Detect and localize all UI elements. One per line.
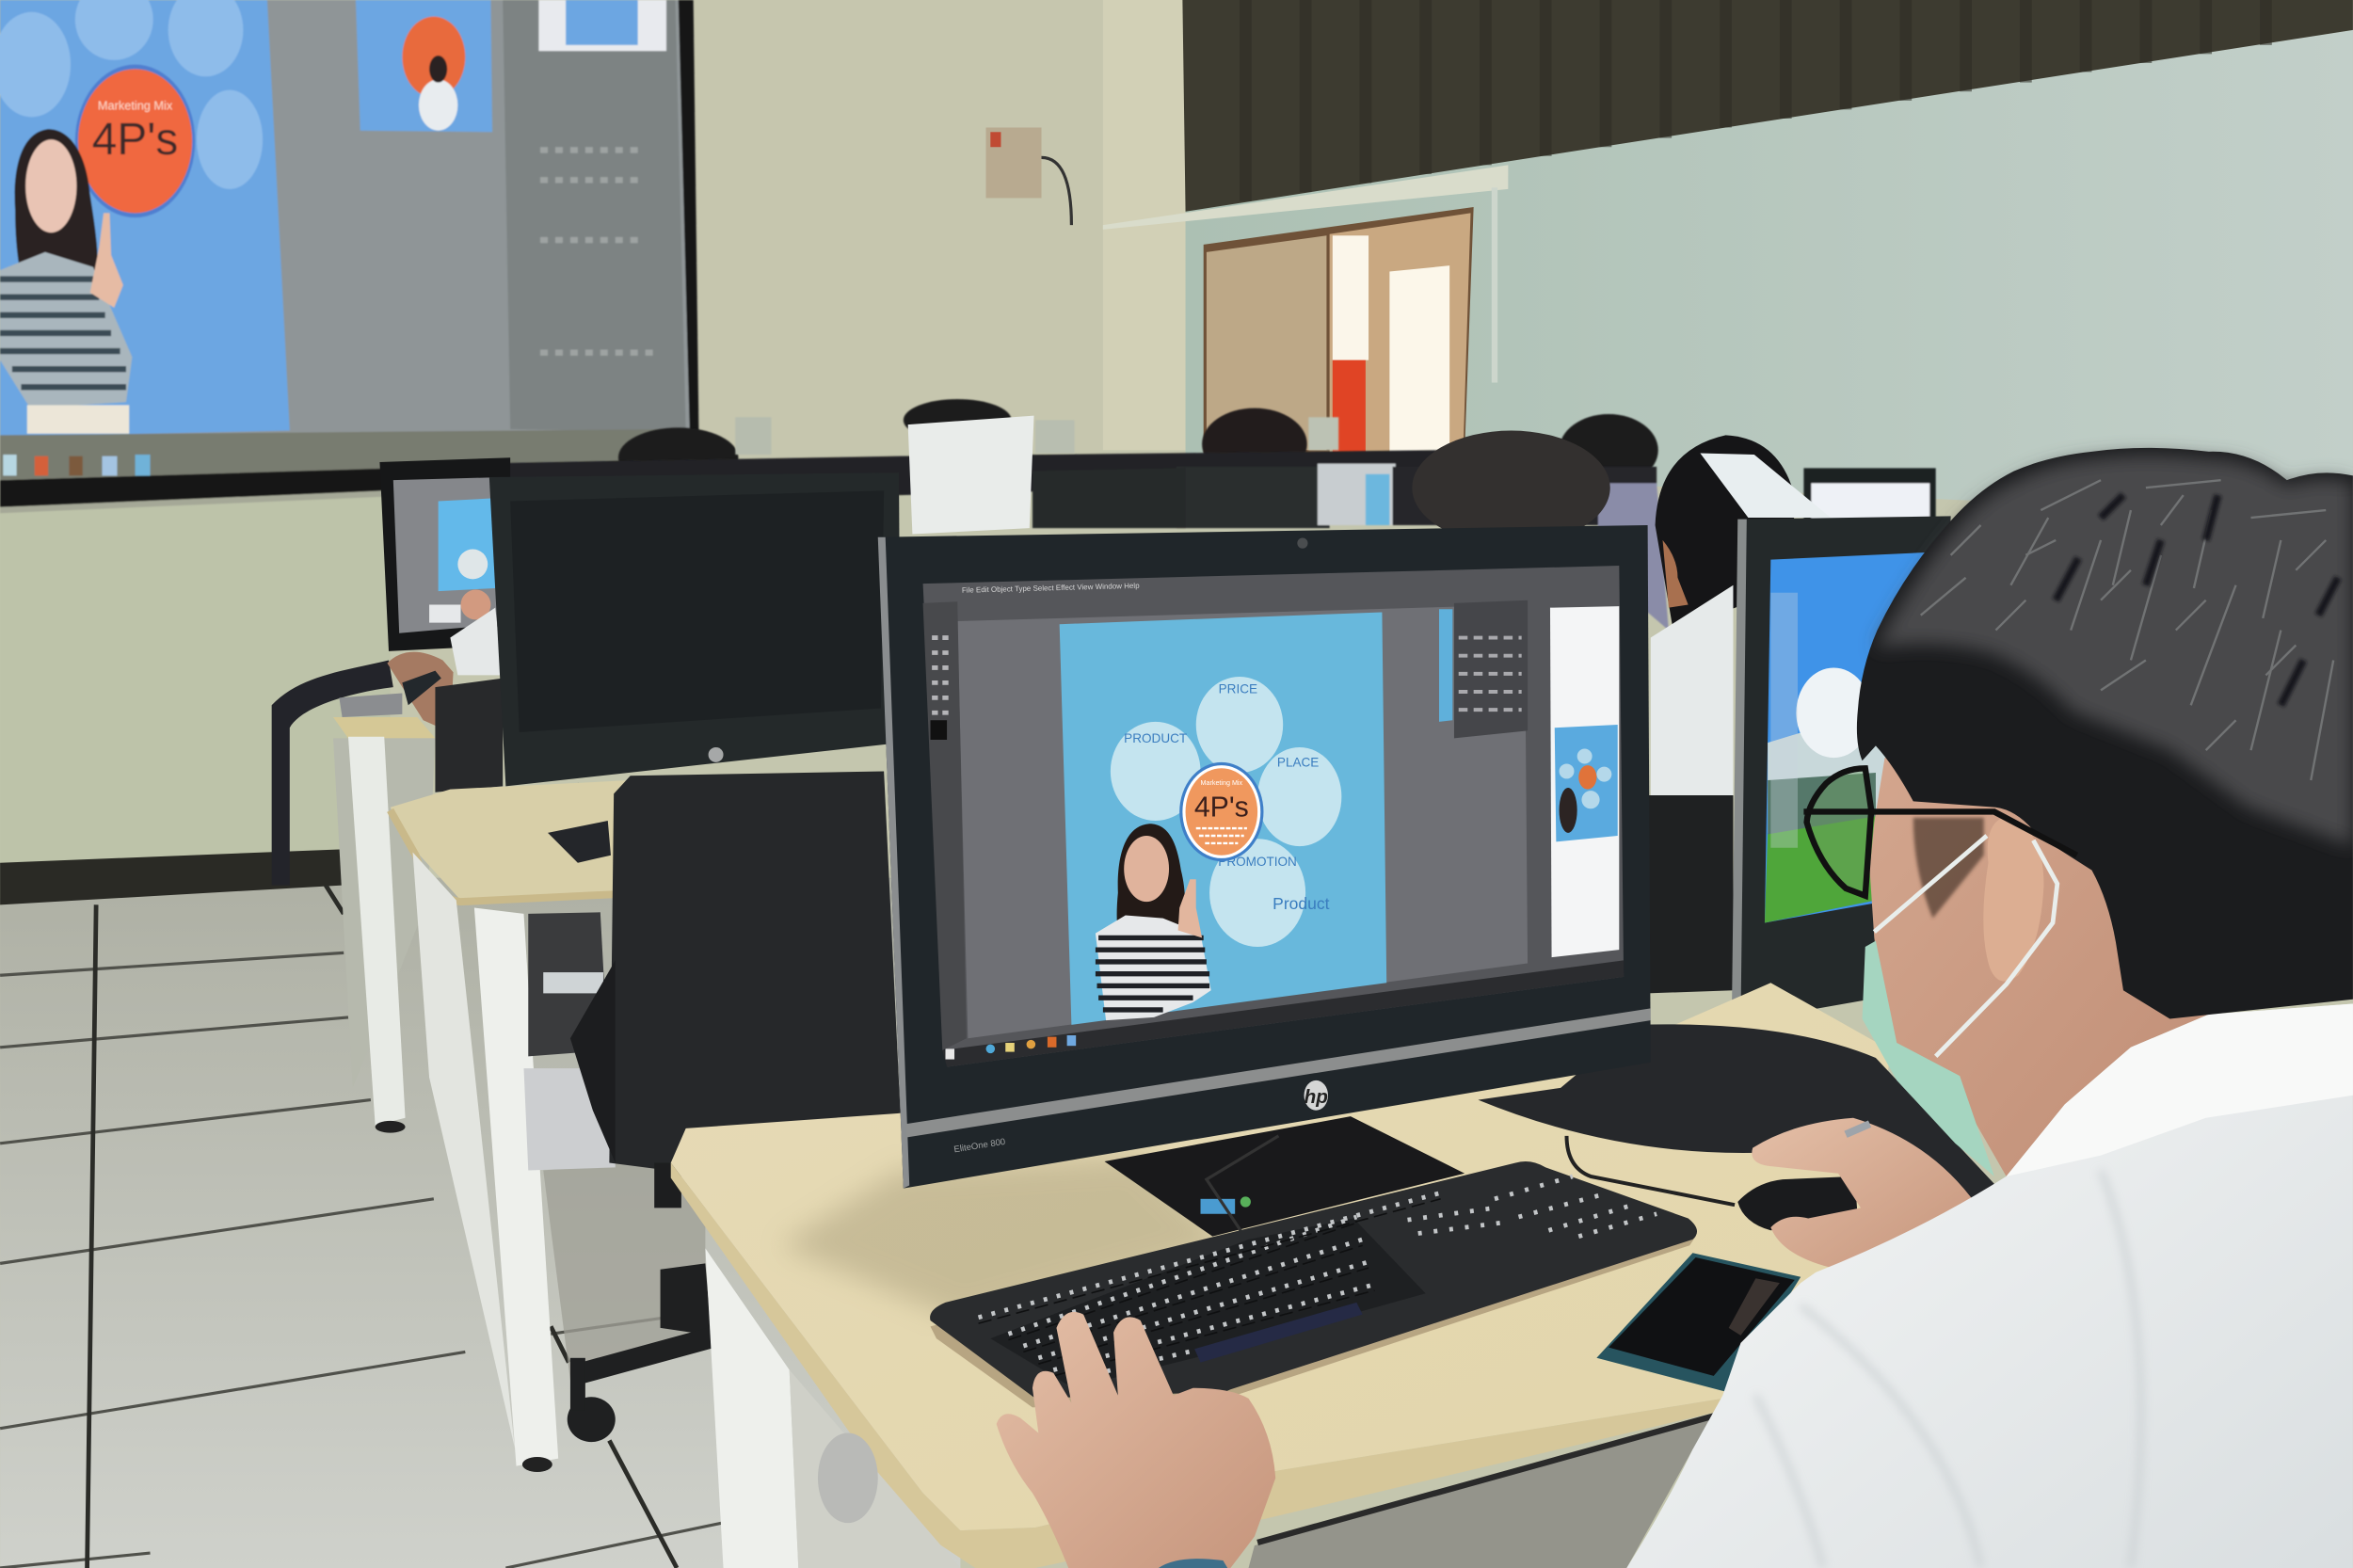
monitor stand xyxy=(1104,1116,1465,1237)
petal labels: PRICE xyxy=(1219,682,1257,696)
right hand on mouse xyxy=(1752,1118,1974,1270)
wristband xyxy=(1159,1559,1227,1568)
seated student arm and sleeve xyxy=(272,608,503,886)
floor tiles xyxy=(0,849,960,1568)
wall switch box xyxy=(986,128,1071,225)
front back-row heads xyxy=(1412,431,1798,631)
panel rows xyxy=(1459,638,1522,710)
paper note xyxy=(908,416,1034,535)
student ear xyxy=(1983,816,2043,982)
main desk xyxy=(671,983,1891,1568)
dark hair patches xyxy=(2056,495,2338,705)
paper note on head xyxy=(1700,453,1831,518)
hair strands xyxy=(1921,480,2333,780)
shirt collar xyxy=(2007,1004,2353,1176)
projected heading: Marketing Mix xyxy=(98,98,173,112)
door xyxy=(1204,207,1474,453)
main monitor xyxy=(878,525,1651,1189)
4P badge: Marketing Mix xyxy=(1201,779,1243,787)
student shirt xyxy=(1626,1004,2353,1568)
glasses xyxy=(1803,768,2077,896)
petal labels: PLACE xyxy=(1277,756,1319,770)
student hair dark xyxy=(1857,448,2353,1019)
thumbnail artboard figure xyxy=(1560,749,1611,833)
projection screen xyxy=(0,0,699,513)
back row people xyxy=(618,399,1658,488)
phone xyxy=(1596,1253,1801,1392)
monitor screen: design app xyxy=(923,566,1624,1067)
second row desk xyxy=(391,780,631,1472)
projected 4P text: 4P's xyxy=(92,115,178,165)
petal labels: PROMOTION xyxy=(1218,855,1297,869)
menu bar text: File Edit Object Type Select Effect View Window Help xyxy=(962,582,1140,595)
model label: EliteOne 800 xyxy=(953,1137,1006,1155)
office chair xyxy=(568,771,901,1442)
petal labels: Product xyxy=(1273,894,1330,913)
sideburn xyxy=(1913,818,1984,919)
student hair highlights xyxy=(1876,456,2353,846)
dark curtain xyxy=(1182,0,2353,212)
key rows xyxy=(979,1192,1441,1378)
desk shadow under monitor xyxy=(780,1156,1230,1320)
student neck and face xyxy=(1870,758,2209,1176)
ring xyxy=(1846,1124,1870,1134)
hp logo: hp xyxy=(1305,1086,1328,1108)
mouse xyxy=(1737,1176,1858,1230)
projected woman xyxy=(0,129,132,434)
mouse cable xyxy=(1567,1136,1735,1205)
left back monitor xyxy=(379,457,510,651)
taskbar icons xyxy=(945,1035,1076,1060)
stand cable xyxy=(1207,1136,1278,1233)
petals xyxy=(1111,677,1341,947)
left hand on keyboard xyxy=(997,1312,1275,1568)
face mask xyxy=(1863,941,1994,1176)
back student shirt xyxy=(1651,585,1733,798)
woman on screen xyxy=(1096,824,1211,1020)
back row monitors xyxy=(381,417,1936,631)
keyboard xyxy=(930,1161,1697,1407)
far desk xyxy=(333,679,503,1133)
mask straps xyxy=(1874,836,2057,1056)
4P badge xyxy=(1179,762,1263,861)
petal labels xyxy=(1124,682,1330,913)
bag on desk xyxy=(1478,1024,1995,1200)
tool icons xyxy=(932,638,950,712)
shirt folds xyxy=(1755,1171,2141,1568)
petal labels: PRODUCT xyxy=(1124,731,1187,745)
4P badge: 4P's xyxy=(1194,792,1249,823)
second row monitor xyxy=(489,472,901,818)
side monitor xyxy=(1648,516,1951,1023)
